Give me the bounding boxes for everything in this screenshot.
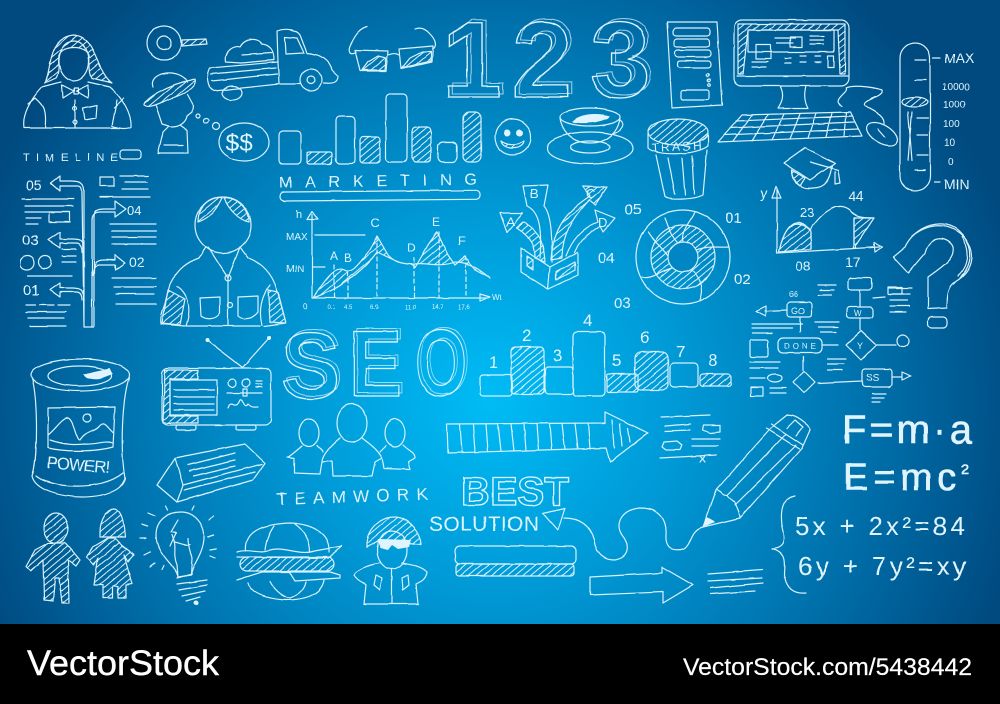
icon: segmented wheel diagram [598, 201, 751, 312]
icon: sunglasses [349, 27, 435, 71]
icon: trash can [648, 119, 708, 199]
bar chart: marketing [279, 94, 481, 164]
timeline diagram with branches: 01 [23, 282, 40, 299]
flowchart [750, 278, 912, 402]
icon: trash can: TRASH [651, 138, 702, 155]
scale gauge with max and min: 0 [948, 157, 954, 168]
scale gauge with max and min [900, 43, 975, 192]
timeline heading: TIMELINE [23, 152, 118, 164]
line chart: max min peaks: 4.5 [344, 305, 353, 311]
icon: computer tower [667, 22, 722, 108]
bar chart: numbered bars 1 to 8 [480, 311, 731, 396]
timeline diagram with branches: 02 [129, 254, 145, 270]
heading: marketing [279, 172, 480, 201]
bar chart: numbered bars 1 to 8: 7 [676, 342, 685, 361]
line chart: max min peaks: C [371, 216, 380, 230]
flowchart: SS [866, 373, 880, 384]
icon: arrows from box: D [598, 215, 607, 230]
line chart: max min peaks: MIN [286, 264, 304, 275]
icon: man figure [26, 513, 80, 603]
numbers 1 2 3 [442, 0, 654, 120]
line chart: max min peaks: h [296, 209, 302, 221]
numbers 1 2 3: 1 [442, 0, 502, 120]
brace and equations [772, 496, 966, 593]
icon: arrows from box [500, 185, 615, 289]
small lines beside arrow [708, 570, 763, 594]
icon: question mark [893, 224, 972, 328]
word: solution: SOLUTION [429, 513, 539, 536]
flowchart: Y [857, 341, 863, 351]
icon: teamwork people [287, 404, 415, 476]
area chart with 23 and 44: 17 [845, 254, 861, 270]
bar chart: numbered bars 1 to 8: 5 [612, 351, 621, 370]
line chart: max min peaks: 6.9 [370, 305, 379, 311]
icon: arrows from box: A [506, 214, 515, 229]
flowchart: W [854, 309, 862, 318]
icon: pencil [703, 415, 810, 527]
icon: segmented wheel diagram: 05 [625, 201, 642, 218]
scale gauge with max and min: MAX [944, 50, 975, 66]
icon: smiley face [495, 119, 531, 155]
flowchart: DONE [784, 342, 816, 351]
bar chart: numbered bars 1 to 8: 1 [489, 353, 498, 372]
timeline diagram with branches: 05 [26, 177, 42, 193]
icon: outline arrow [590, 567, 693, 603]
icon: retro television [162, 336, 271, 430]
bar chart: numbered bars 1 to 8: 2 [522, 326, 531, 345]
icon: arrows from box: B [530, 186, 539, 201]
heading: SEO: E [352, 308, 405, 413]
numbers 1 2 3: 3 [590, 0, 650, 120]
icon: arrows from box: C [586, 186, 595, 201]
timeline diagram with branches: 04 [127, 203, 141, 218]
icon: segmented wheel diagram: 01 [725, 210, 742, 227]
icon: segmented wheel diagram: 03 [614, 295, 631, 312]
icon: can labelled power: POWER! [46, 453, 111, 478]
stacked bars [455, 546, 576, 576]
icon: graduation cap [784, 148, 840, 188]
scale gauge with max and min: 10000 [942, 82, 970, 93]
black footer bar [0, 624, 1000, 704]
scale gauge with max and min: 100 [943, 119, 960, 130]
area chart with 23 and 44: 44 [848, 188, 864, 204]
line chart: max min peaks [286, 209, 503, 311]
line chart: max min peaks: E [432, 215, 440, 229]
line chart: max min peaks: 11.0 [405, 305, 417, 311]
heading: SEO: S [284, 310, 343, 415]
icon: burger [237, 523, 342, 600]
area chart with 23 and 44 [760, 185, 883, 274]
scale gauge with max and min: MIN [944, 176, 970, 192]
heading: SEO: O [415, 310, 467, 415]
brace and equations: 5x + 2x²=84 [795, 511, 965, 541]
icon: can labelled power [31, 359, 129, 497]
scale gauge with max and min: 1000 [943, 100, 966, 111]
icon: man in hat [144, 73, 195, 153]
icon: man with sunglasses [354, 517, 427, 604]
heading: SEO: O [418, 308, 470, 413]
formula: energy: 2 [961, 461, 969, 477]
footer brand: VectorStock [27, 644, 220, 683]
line chart: max min peaks: D [407, 241, 416, 255]
line chart: max min peaks: 14.7 [432, 305, 444, 311]
icon: eraser [157, 444, 265, 502]
formula: force: F=m·a [842, 408, 973, 452]
bar chart: numbered bars 1 to 8: 4 [583, 311, 592, 330]
word: best: BEST [461, 470, 569, 514]
bar chart: numbered bars 1 to 8: 6 [640, 328, 649, 347]
bar chart: numbered bars 1 to 8: 8 [708, 351, 717, 370]
thought bubble with money [196, 114, 269, 161]
icon: segmented wheel diagram: 04 [598, 250, 615, 267]
icon: triangle arrow and squiggle line [543, 508, 703, 560]
brace and equations: 6y + 7y²=xy [798, 551, 966, 581]
area chart with 23 and 44: 08 [795, 258, 811, 274]
line chart: max min peaks: 0 [303, 302, 308, 311]
icon: frying pan [147, 26, 207, 60]
icon: pickup truck [208, 29, 338, 100]
timeline heading [23, 150, 141, 164]
line chart: max min peaks: Wt [492, 293, 503, 302]
icon: large hatched arrow [447, 412, 648, 462]
line chart: max min peaks: F [458, 234, 465, 248]
heading: SEO [281, 308, 470, 418]
icon: woman figure [87, 509, 134, 598]
icon: woman with hood [24, 35, 131, 129]
heading: SEO: S [281, 313, 340, 418]
flowchart: GO [791, 306, 805, 316]
numbers 1 2 3: 2 [512, 0, 572, 120]
timeline diagram with branches [20, 176, 156, 327]
icon: man in jacket [161, 197, 286, 326]
line chart: max min peaks: B [344, 251, 352, 265]
thought bubble with money: $$ [226, 130, 253, 157]
line chart: max min peaks: MAX [286, 232, 308, 243]
icon: segmented wheel diagram: 02 [734, 271, 751, 288]
small text block lines [660, 415, 720, 462]
icon: coffee cup and saucer [547, 108, 633, 164]
bar chart: numbered bars 1 to 8: 3 [553, 346, 562, 365]
line chart: max min peaks: A [330, 249, 338, 263]
footer url: VectorStock.com/5438442 [683, 654, 972, 681]
icon: light bulb [140, 506, 216, 606]
heading: marketing: MARKETING [279, 172, 477, 192]
flowchart: 66 [789, 290, 798, 299]
timeline diagram with branches: 03 [22, 232, 39, 249]
area chart with 23 and 44: y [760, 185, 767, 201]
formula: energy: E=mc [843, 457, 956, 499]
line chart: max min peaks: 17.6 [458, 305, 470, 311]
heading: SEO: E [349, 311, 402, 416]
line chart: max min peaks: 0.1 [327, 305, 336, 311]
scale gauge with max and min: 10 [944, 138, 956, 149]
area chart with 23 and 44: 23 [800, 205, 814, 220]
label: teamwork: TEAMWORK [276, 485, 429, 509]
icon: desktop computer [718, 20, 901, 150]
